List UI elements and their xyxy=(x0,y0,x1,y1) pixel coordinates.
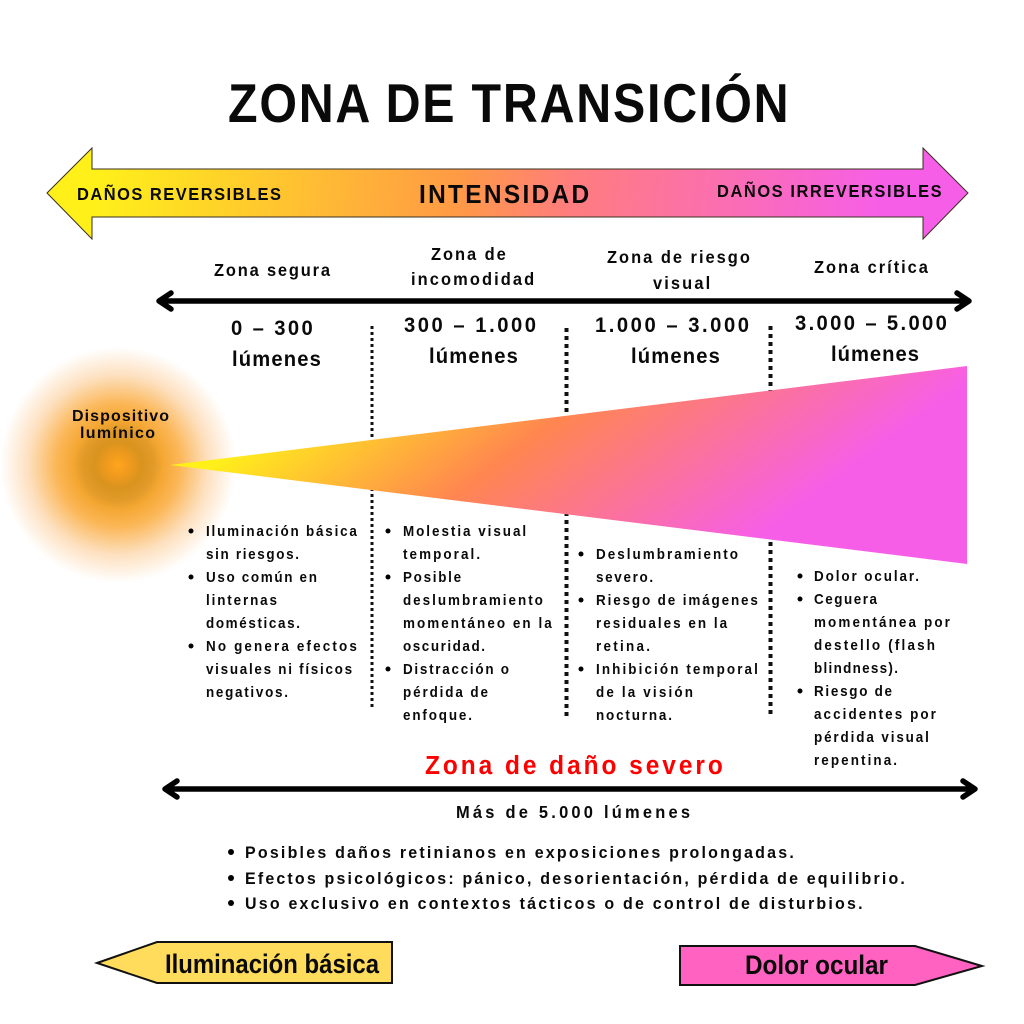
legend arrow: dolor ocular xyxy=(680,946,982,985)
list: zona segura: domésticas. xyxy=(206,615,300,631)
list: zona de riesgo visual: Riesgo de imágenes xyxy=(596,592,758,608)
list: severe damage effects: Efectos psicológicos: pánico, desorientación, pérdida de equilibrio. xyxy=(245,870,905,888)
list: zona crítica: destello (flash xyxy=(814,637,935,653)
label: intensidad: INTENSIDAD xyxy=(419,180,589,209)
legend arrow: iluminación básica: Iluminación básica xyxy=(165,949,380,979)
device label xyxy=(72,408,169,442)
zone heading: incomodidad: Zona de xyxy=(431,245,506,264)
list: zona segura: Iluminación básica xyxy=(206,523,357,539)
severe damage range: Más de 5.000 lúmenes xyxy=(456,803,690,822)
list: zona de riesgo visual: de la visión xyxy=(596,684,693,700)
list: zona de riesgo visual: Deslumbramiento xyxy=(596,546,738,562)
severe damage arrow xyxy=(165,781,975,797)
list: zona de riesgo visual: residuales en la xyxy=(596,615,727,631)
zone heading: incomodidad xyxy=(411,245,534,289)
lumen range: 3000-5000: 3.000 – 5.000 xyxy=(795,311,947,335)
lumen range: 0-300 xyxy=(231,316,321,371)
list: zona crítica: blindness). xyxy=(814,660,898,676)
dotted divider 3 xyxy=(768,326,772,714)
list: zona segura: Uso común en xyxy=(206,569,317,585)
zone heading: riesgo visual xyxy=(607,248,750,293)
list: zona segura: visuales ni físicos xyxy=(206,661,352,677)
lumen range: 0-300: 0 – 300 xyxy=(231,316,313,340)
list: zona segura: negativos. xyxy=(206,684,288,700)
list: zona segura: sin riesgos. xyxy=(206,546,299,562)
dotted divider 1 xyxy=(370,326,374,710)
legend arrow: iluminación básica xyxy=(97,942,392,983)
label: daños reversibles: DAÑOS REVERSIBLES xyxy=(77,184,281,204)
list: zona de incomodidad xyxy=(386,523,552,723)
list: zona crítica: Riesgo de xyxy=(814,683,892,699)
list: zona crítica: pérdida visual xyxy=(814,729,929,745)
list: zona de incomodidad: temporal. xyxy=(403,546,480,562)
label: daños irreversibles: DAÑOS IRREVERSIBLES xyxy=(717,181,942,201)
list: zona crítica: accidentes por xyxy=(814,706,936,722)
zone heading: incomodidad: incomodidad xyxy=(411,270,534,289)
zone heading: riesgo visual: Zona de riesgo xyxy=(607,248,750,267)
list: zona de riesgo visual: severo. xyxy=(596,569,653,585)
dotted divider 2 xyxy=(564,328,568,717)
list: zona crítica xyxy=(798,568,950,768)
list: zona segura: No genera efectos xyxy=(206,638,357,654)
list: zona de incomodidad: enfoque. xyxy=(403,707,472,723)
intensity cone xyxy=(170,366,967,564)
lumen range: 300-1000: lúmenes xyxy=(429,344,518,368)
lumen range: 1000-3000 xyxy=(595,313,749,368)
list: severe damage effects: Posibles daños retinianos en exposiciones prolongadas. xyxy=(245,844,794,862)
title: ZONA DE TRANSICIÓN xyxy=(228,72,789,134)
zone scale arrow xyxy=(159,293,969,309)
device label: lumínico xyxy=(80,425,155,442)
list: severe damage effects: Uso exclusivo en contextos tácticos o de control de disturbios. xyxy=(245,895,863,913)
device label: Dispositivo xyxy=(72,408,169,425)
list: zona de riesgo visual: retina. xyxy=(596,638,650,654)
list: zona de riesgo visual: nocturna. xyxy=(596,707,672,723)
list: zona de incomodidad: Distracción o xyxy=(403,661,509,677)
list: zona segura: linternas xyxy=(206,592,277,608)
lumen range: 1000-3000: lúmenes xyxy=(631,344,720,368)
list: zona de riesgo visual: Inhibición temporal xyxy=(596,661,758,677)
lumen range: 0-300: lúmenes xyxy=(232,347,321,371)
list: zona de incomodidad: oscuridad. xyxy=(403,638,485,654)
list: zona crítica: Ceguera xyxy=(814,591,877,607)
list: zona de incomodidad: Molestia visual xyxy=(403,523,526,539)
lumen range: 300-1000: 300 – 1.000 xyxy=(404,313,536,337)
zone heading: riesgo visual: visual xyxy=(653,274,710,293)
list: severe damage effects xyxy=(228,844,905,913)
list: zona segura xyxy=(188,523,357,700)
lumen range: 3000-5000 xyxy=(795,311,947,366)
zone heading: crítica: Zona crítica xyxy=(814,258,928,277)
light glow: device xyxy=(0,347,236,583)
lumen range: 300-1000 xyxy=(404,313,536,368)
list: zona de incomodidad: pérdida de xyxy=(403,684,488,700)
list: zona crítica: repentina. xyxy=(814,752,897,768)
arrow: reversible to irreversible xyxy=(47,148,968,239)
list: zona de incomodidad: deslumbramiento xyxy=(403,592,543,608)
legend arrow: dolor ocular: Dolor ocular xyxy=(745,950,888,980)
list: zona de riesgo visual xyxy=(578,546,758,723)
intensity arrow banner xyxy=(47,148,968,239)
lumen range: 1000-3000: 1.000 – 3.000 xyxy=(595,313,749,337)
list: zona crítica: Dolor ocular. xyxy=(814,568,919,584)
zone heading: segura: Zona segura xyxy=(214,261,331,280)
heading: zona de daño severo: Zona de daño severo xyxy=(425,751,723,780)
list: zona de incomodidad: momentáneo en la xyxy=(403,615,552,631)
list: zona de incomodidad: Posible xyxy=(403,569,461,585)
lumen range: 3000-5000: lúmenes xyxy=(831,342,919,366)
list: zona crítica: momentánea por xyxy=(814,614,950,630)
